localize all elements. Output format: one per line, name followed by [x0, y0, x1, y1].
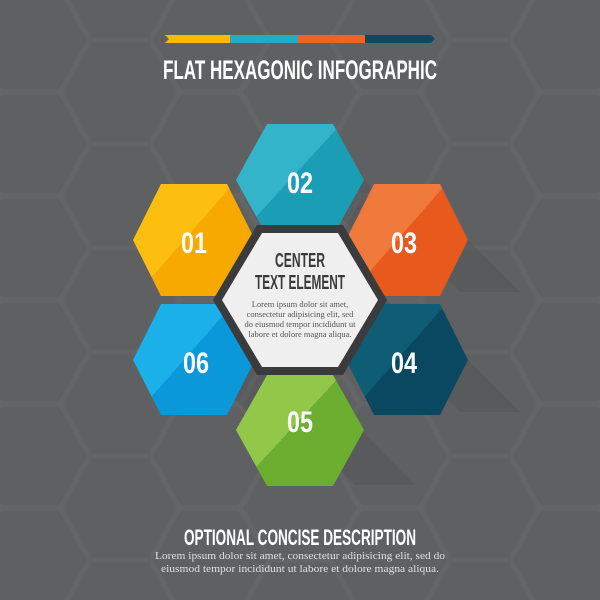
center body text: consectetur adipisicing elit, sed [247, 309, 354, 319]
description heading: OPTIONAL CONCISE DESCRIPTION [184, 525, 416, 550]
center hexagon: TEXT ELEMENT [255, 272, 345, 294]
center heading: CENTER [275, 250, 325, 272]
description text: eiusmod tempor incididunt ut labore et dolore magna aliqua. [161, 563, 439, 575]
hexagon 03: 03 [391, 227, 417, 260]
description text [155, 550, 446, 575]
color bar [165, 35, 435, 43]
hexagon 02: 02 [287, 167, 313, 200]
center body text: do eiusmod tempor incididunt ut [245, 319, 356, 329]
hexagon 06 [133, 304, 255, 415]
center body text [245, 299, 356, 339]
hexagon 03 [346, 184, 468, 296]
hexagon 04 [346, 304, 468, 415]
center body text: labore et dolore magna aliqua. [248, 329, 352, 339]
hexagon 02 [236, 124, 364, 236]
shadows [194, 180, 520, 485]
description text: Lorem ipsum dolor sit amet, consectetur adipisicing elit, sed do [155, 550, 446, 562]
title: FLAT HEXAGONIC INFOGRAPHIC [163, 55, 437, 85]
hexagon 04: 04 [391, 347, 417, 380]
hexagon 05: 05 [287, 406, 313, 439]
hexagon 05 [236, 375, 364, 486]
center hexagon [213, 225, 387, 375]
hexagon 01 [133, 184, 255, 296]
hexagon 01: 01 [181, 227, 207, 260]
hexagon 06: 06 [183, 347, 209, 380]
center body text: Lorem ipsum dolor sit amet, [252, 299, 348, 309]
